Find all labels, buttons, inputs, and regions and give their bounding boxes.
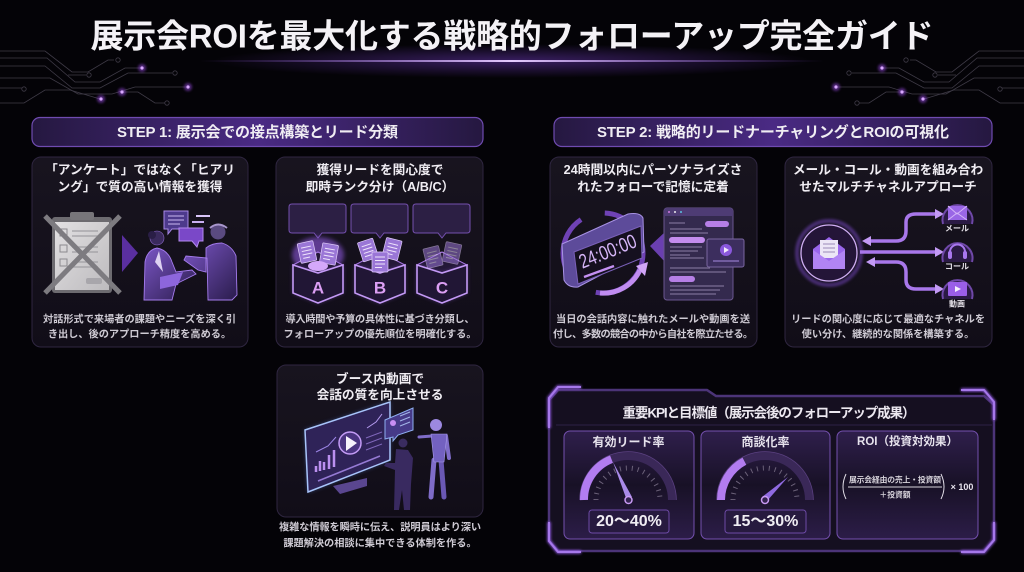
- panel body: hearing: 対話形式で来場者の課題やニーズを深く引: [43, 312, 236, 326]
- panel: personalized follow: [550, 157, 757, 347]
- label: mail: メール: [945, 224, 969, 233]
- circuit decoration right: [832, 51, 1024, 105]
- illustration: presenter: [384, 438, 413, 510]
- panel body: ranking: [284, 312, 476, 340]
- panel body: personalized follow: 当日の会話内容に触れたメールや動画を送: [556, 312, 750, 326]
- panel body: personalized follow: [553, 312, 753, 340]
- KPI card: meeting rate: 商談化率: [741, 434, 790, 449]
- KPI card: meeting rate: [701, 431, 830, 539]
- KPI card: ROI: [837, 431, 978, 539]
- gauge: meeting rate: [717, 452, 813, 504]
- panel body: multichannel: 使い分け、継続的な関係を構築する。: [802, 328, 974, 340]
- panel: ranking: [276, 157, 483, 347]
- panel heading: booth video: 会話の質を向上させる: [317, 387, 443, 402]
- crate C: [417, 242, 467, 303]
- panel heading: hearing: [45, 163, 235, 194]
- value: valid lead rate: 20〜40%: [596, 513, 662, 530]
- panel heading: multichannel: [793, 162, 983, 194]
- panel heading: personalized follow: れたフォローで記憶に定着: [577, 179, 729, 194]
- gauge: valid lead rate: [580, 452, 676, 504]
- icon: central envelope: [797, 221, 861, 285]
- KPI card: valid lead rate: 有効リード率: [592, 434, 665, 449]
- illustration: conversation: [144, 211, 237, 300]
- crate B: B: [374, 278, 386, 298]
- icon: video channel: [942, 280, 972, 299]
- title: 展示会ROIを最大化する戦略的フォローアップ完全ガイド: [90, 18, 934, 54]
- illustration: monitor: [305, 402, 413, 494]
- label: video: 動画: [949, 298, 965, 308]
- step 1 header: [32, 118, 483, 146]
- ROI formula: 展示会経由の売上・投資額: [849, 474, 941, 484]
- KPI frame: [549, 387, 994, 552]
- illustration: robot: [419, 419, 449, 497]
- KPI card: ROI: ROI（投資対効果）: [857, 434, 958, 448]
- arrows: channels: [860, 209, 944, 294]
- arrow: [122, 235, 138, 272]
- panel heading: booth video: [317, 371, 443, 402]
- empty bubbles: [289, 204, 470, 238]
- panel heading: personalized follow: [564, 162, 742, 194]
- step 2 header: [554, 118, 992, 146]
- icon: mail channel: [942, 205, 972, 224]
- panel: multichannel: [785, 157, 992, 347]
- panel body: ranking: 導入時間や予算の具体性に基づき分類し、: [286, 312, 474, 326]
- crate C: C: [436, 278, 448, 298]
- panel heading: multichannel: メール・コール・動画を組み合わ: [793, 162, 983, 177]
- ROI formula: [843, 474, 973, 500]
- step 1 header: STEP 1: 展示会での接点構築とリード分類: [117, 123, 398, 141]
- panel heading: personalized follow: 24時間以内にパーソナライズさ: [564, 162, 742, 177]
- ROI formula: ＋投資額: [879, 490, 911, 500]
- panel body: ranking: フォローアップの優先順位を明確化する。: [284, 328, 476, 340]
- panel: KPI: [549, 387, 994, 552]
- panel heading: ranking: 獲得リードを関心度で: [317, 162, 443, 177]
- panel heading: ranking: 即時ランク分け（A/B/C）: [306, 179, 454, 194]
- crate A: [292, 237, 344, 303]
- icon: crossed clipboard: [45, 212, 120, 293]
- panel body: multichannel: リードの関心度に応じて最適なチャネルを: [791, 312, 985, 326]
- booth video body: 課題解決の相談に集中できる体制を作る。: [283, 536, 477, 550]
- panel: booth video: [277, 365, 483, 517]
- panel body: hearing: き出し、後のアプローチ精度を高める。: [48, 328, 231, 340]
- icon: countdown clock: [562, 213, 648, 293]
- panel: hearing: [32, 157, 248, 347]
- title glow line: [200, 44, 824, 78]
- booth video body: [279, 520, 481, 550]
- step 2 header: STEP 2: 戦略的リードナーチャリングとROIの可視化: [597, 123, 949, 141]
- panel heading: booth video: ブース内動画で: [336, 371, 424, 386]
- panel body: multichannel: [791, 312, 985, 340]
- KPI card: valid lead rate: [564, 431, 694, 539]
- panel body: personalized follow: 付し、多数の競合の中から自社を際立たせる。: [553, 328, 753, 340]
- KPI heading: 重要KPIと目標値（展示会後のフォローアップ成果）: [622, 404, 916, 420]
- booth video body: 複雑な情報を瞬時に伝え、説明員はより深い: [279, 520, 481, 534]
- circuit decoration left: [0, 51, 192, 105]
- icon: countdown clock: 24:00:00: [576, 231, 640, 273]
- panel heading: hearing: 「アンケート」ではなく「ヒアリ: [45, 163, 235, 177]
- panel body: hearing: [43, 312, 236, 340]
- ROI formula: × 100: [951, 482, 973, 492]
- panel heading: ranking: [306, 162, 454, 194]
- label: call: コール: [945, 262, 969, 271]
- panel heading: multichannel: せたマルチチャネルアプローチ: [799, 180, 977, 194]
- icon: email with video: [664, 208, 744, 300]
- arrow: [650, 232, 665, 262]
- crate A: A: [312, 278, 324, 298]
- crate B: [355, 237, 405, 303]
- icon: call channel: [942, 243, 972, 262]
- panel heading: hearing: ング」で質の高い情報を獲得: [58, 179, 223, 194]
- value: meeting rate: 15〜30%: [733, 513, 798, 530]
